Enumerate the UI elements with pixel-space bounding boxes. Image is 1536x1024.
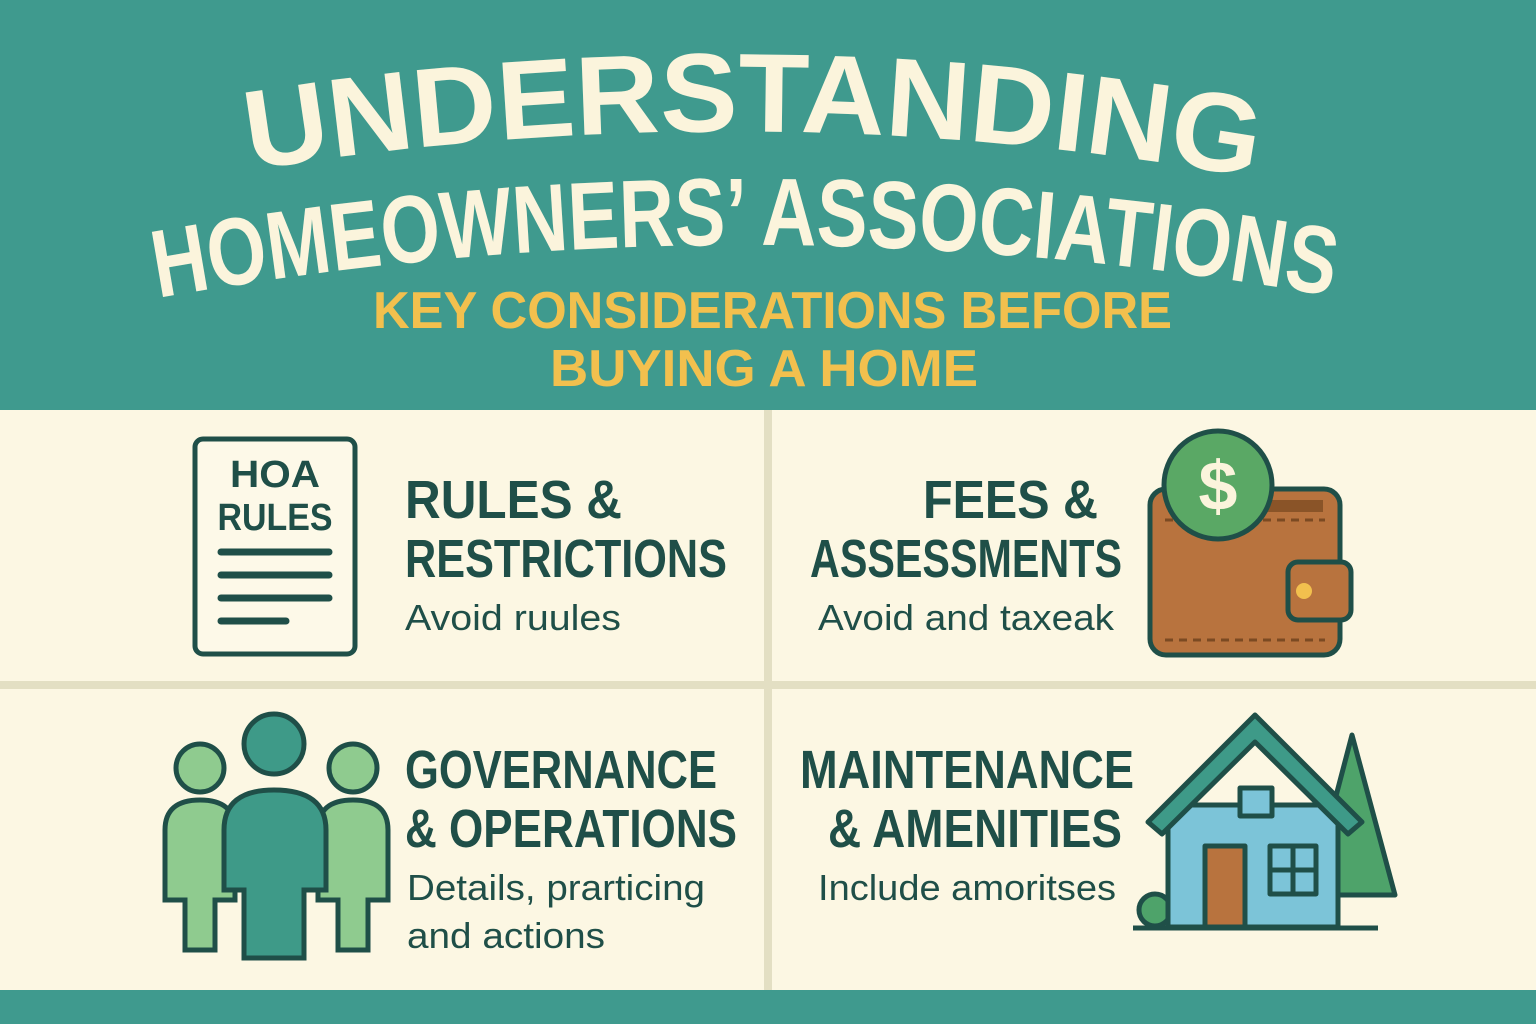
title (152, 53, 1336, 297)
icon: house (1133, 715, 1395, 928)
panel: fees: ASSESSMENTS (810, 529, 1122, 589)
icon: HOA rules document (195, 439, 355, 654)
panel: governance: GOVERNANCE (405, 740, 717, 800)
panel: fees: FEES & (923, 470, 1098, 530)
subtitle: KEY CONSIDERATIONS BEFORE (373, 282, 1172, 340)
header band (0, 0, 1536, 410)
panel: governance: & OPERATIONS (405, 799, 737, 859)
subtitle: BUYING A HOME (550, 340, 978, 398)
title: HOMEOWNERS’ ASSOCIATIONS (152, 178, 1336, 297)
panel: fees (810, 431, 1351, 655)
panel: governance: and actions (407, 915, 605, 956)
panel: governance (165, 714, 737, 958)
panel: fees: Avoid and taxeak (818, 597, 1115, 638)
panel: maintenance: Include amoritses (818, 867, 1116, 908)
subtitle (373, 282, 1172, 398)
panel: maintenance (800, 715, 1395, 928)
bottom band (0, 990, 1536, 1024)
panel: rules: Avoid ruules (405, 597, 621, 638)
panel: rules (195, 439, 727, 654)
panel: maintenance: & AMENITIES (828, 799, 1122, 859)
icon: wallet (1150, 431, 1351, 655)
panel: rules: RULES & (405, 470, 622, 530)
icon: wallet: $ (1199, 447, 1237, 525)
icon: HOA rules document: RULES (218, 497, 332, 539)
panel: rules: RESTRICTIONS (405, 529, 727, 589)
panel: governance: Details, prarticing (407, 867, 705, 908)
icon: HOA rules document: HOA (230, 454, 320, 496)
panel: maintenance: MAINTENANCE (800, 740, 1134, 800)
title: UNDERSTANDING (246, 53, 1256, 172)
icon: people (165, 714, 388, 958)
